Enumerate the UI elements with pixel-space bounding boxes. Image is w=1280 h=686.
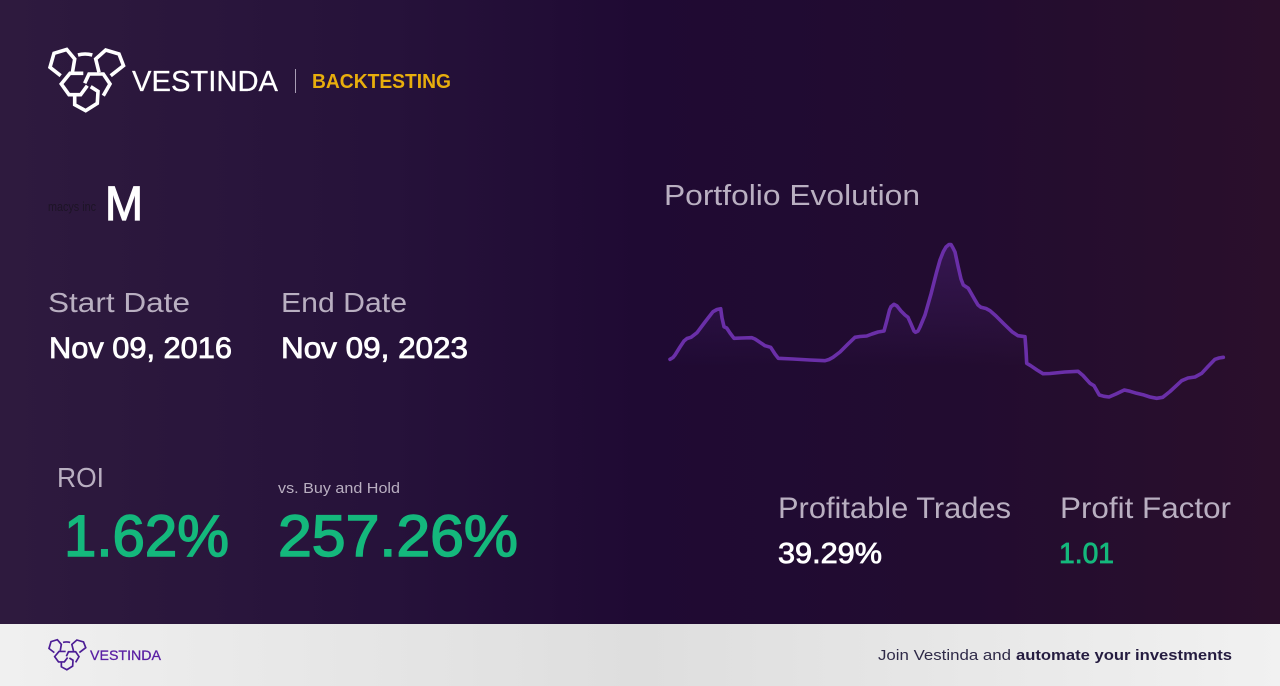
footer brand name: VESTINDA — [90, 647, 162, 663]
footer call to action — [878, 647, 1232, 664]
chart area fill — [670, 244, 1028, 366]
end date — [281, 287, 468, 365]
end date label: End Date — [281, 287, 407, 318]
buy and hold metric — [278, 480, 518, 569]
profit factor value: 1.01 — [1059, 538, 1114, 570]
portfolio evolution chart — [664, 180, 1223, 398]
brand name: VESTINDA — [132, 66, 278, 98]
chart line — [670, 244, 1223, 398]
footer call to action: Join Vestinda and — [878, 647, 1011, 664]
start date — [48, 287, 232, 365]
ROI label: ROI — [57, 462, 104, 493]
header brand — [50, 50, 451, 111]
footer band — [0, 624, 1280, 686]
profit factor label: Profit Factor — [1060, 492, 1231, 525]
chart title: Portfolio Evolution — [664, 180, 920, 212]
footer call to action: automate your investments — [1016, 647, 1232, 664]
icon: Vestinda hexagon logo — [50, 50, 124, 111]
profitable trades label: Profitable Trades — [778, 492, 1011, 525]
ROI value: 1.62% — [64, 504, 229, 569]
start date label: Start Date — [48, 287, 190, 318]
divider — [295, 69, 296, 93]
ticker block — [48, 178, 143, 231]
buy and hold value: 257.26% — [278, 504, 518, 569]
section label: BACKTESTING — [312, 71, 451, 93]
end date value: Nov 09, 2023 — [281, 332, 468, 365]
ROI metric — [57, 462, 229, 569]
footer background — [0, 624, 1280, 686]
icon: footer logo — [49, 640, 86, 670]
buy and hold label: vs. Buy and Hold — [278, 480, 400, 497]
company name: macys inc — [48, 200, 96, 214]
profitable trades metric — [778, 492, 1011, 570]
profitable trades value: 39.29% — [778, 538, 882, 570]
start date value: Nov 09, 2016 — [49, 332, 232, 365]
ticker symbol: M — [105, 178, 143, 231]
profit factor metric — [1059, 492, 1231, 570]
